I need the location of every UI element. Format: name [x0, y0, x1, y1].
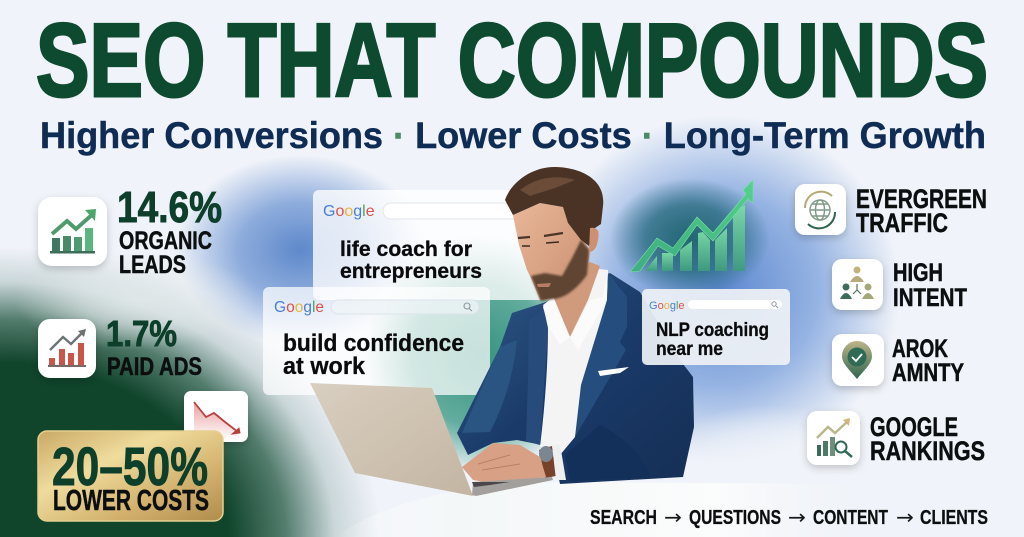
face — [513, 203, 590, 300]
sleeve shading — [462, 340, 517, 433]
shirt — [540, 268, 608, 455]
mouth — [537, 283, 551, 287]
stat: organic leads: 14.6% — [117, 183, 222, 232]
label: google rankings — [870, 412, 985, 466]
jacket — [457, 273, 694, 484]
hair — [505, 167, 603, 246]
query text: NLP coaching — [656, 320, 769, 341]
pocket square — [598, 367, 629, 376]
label: evergreen traffic: EVERGREEN — [856, 184, 987, 214]
beard — [531, 240, 589, 301]
logo: Google: Google — [649, 300, 685, 312]
icon: organic growth chart — [38, 197, 107, 266]
icon: location check — [832, 334, 884, 386]
label: arok amnty: AMNTY — [892, 359, 964, 387]
panel: left stats — [38, 183, 248, 521]
watch strap — [539, 446, 556, 478]
label: google rankings: RANKINGS — [870, 436, 985, 466]
label: evergreen traffic — [856, 184, 987, 238]
footer funnel line: CONTENT — [813, 507, 888, 529]
footer funnel line: QUESTIONS — [689, 507, 781, 529]
icon: people network — [832, 259, 883, 310]
icon: search — [464, 303, 472, 311]
label: arok amnty: AROK — [892, 335, 948, 363]
query text: life coach for — [340, 237, 473, 261]
footer funnel line: → — [896, 505, 914, 529]
label: high intent — [893, 259, 967, 312]
collar — [543, 270, 608, 350]
footer funnel line: SEARCH — [590, 507, 657, 529]
icon: falling cost chart — [184, 391, 248, 442]
query text — [340, 237, 482, 283]
panel: right benefits — [795, 184, 987, 466]
left lapel — [526, 308, 548, 445]
footer funnel line: → — [788, 505, 806, 529]
callout: lower costs: LOWER COSTS — [53, 485, 209, 517]
query text — [656, 320, 769, 360]
panel: search card build confidence — [263, 287, 490, 395]
label: high intent: INTENT — [893, 284, 967, 312]
icon: paid ads chart — [38, 319, 96, 378]
stat: organic leads: LEADS — [119, 251, 186, 279]
hand — [462, 443, 546, 483]
icon: evergreen globe — [795, 184, 846, 235]
cuff — [552, 444, 566, 480]
ear — [589, 228, 599, 252]
callout: lower costs: 20–50% — [52, 437, 208, 497]
illustration: man at laptop — [310, 167, 694, 496]
subtitle: Higher Conversions · Lower Costs · Long-Term Growth — [40, 115, 986, 156]
panel: search card NLP coaching — [642, 289, 790, 365]
footer funnel line: CLIENTS — [920, 507, 988, 529]
callout: lower costs — [38, 431, 223, 521]
stat: paid ads: PAID ADS — [107, 353, 202, 381]
label: evergreen traffic: TRAFFIC — [856, 208, 948, 238]
query text — [283, 330, 464, 380]
query text: near me — [656, 339, 723, 360]
right lapel — [575, 273, 627, 437]
stat: organic leads: ORGANIC — [119, 227, 212, 255]
icon: rankings magnifier — [807, 411, 860, 465]
stat: organic leads — [117, 183, 222, 279]
query text: entrepreneurs — [340, 259, 482, 283]
laptop base — [472, 477, 553, 496]
neck — [553, 262, 600, 337]
label: google rankings: GOOGLE — [870, 412, 958, 442]
fingers — [478, 455, 520, 470]
panel: search card life coach — [313, 190, 553, 300]
brows and eyes — [518, 233, 563, 238]
watch face — [539, 446, 553, 462]
laptop lid — [310, 383, 473, 496]
icon: search — [772, 302, 778, 308]
footer funnel line — [590, 505, 988, 529]
query text: build confidence — [283, 330, 464, 357]
stat: paid ads — [106, 313, 202, 381]
logo: Google: Google — [274, 299, 324, 316]
table surface — [335, 482, 880, 537]
stat: paid ads: 1.7% — [106, 313, 177, 354]
chart: glowing green growth — [630, 180, 753, 272]
query text: at work — [283, 353, 366, 380]
label: high intent: HIGH — [893, 259, 943, 287]
label: arok amnty — [892, 335, 964, 387]
footer funnel line: → — [664, 505, 682, 529]
logo: Google: Google — [323, 203, 375, 220]
